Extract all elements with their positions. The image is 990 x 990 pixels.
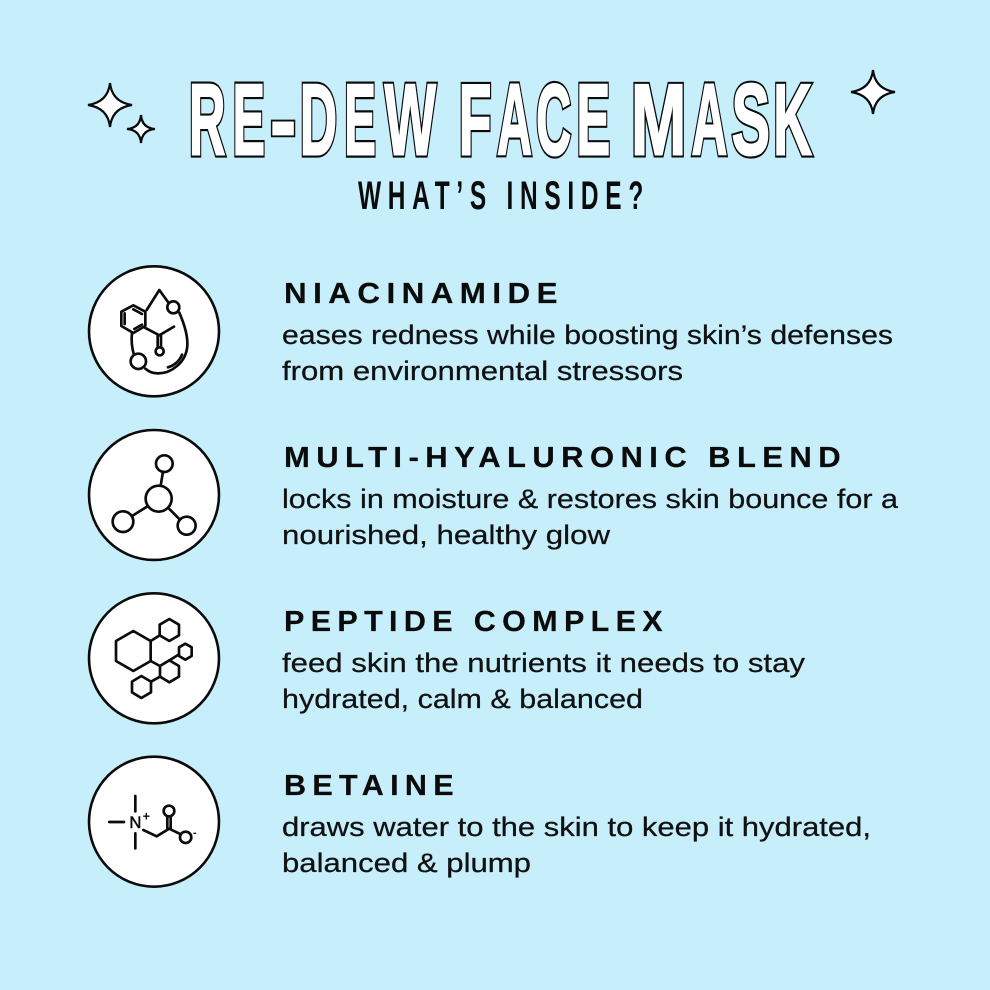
title: D xyxy=(300,63,337,176)
icon: three-node molecule xyxy=(89,430,219,560)
title: F xyxy=(459,65,491,177)
title: - xyxy=(270,64,296,177)
ingredient: niacinamide xyxy=(89,266,893,396)
description: peptide complex: hydrated, calm & balanced xyxy=(282,684,643,714)
description: multi-hyaluronic blend xyxy=(282,484,898,550)
title: C xyxy=(536,63,571,176)
description: betaine: draws water to the skin to keep it hydrated, xyxy=(282,812,871,842)
description: peptide complex xyxy=(282,648,806,714)
title: A xyxy=(692,63,727,176)
title: A xyxy=(497,63,532,176)
title: E xyxy=(233,63,265,176)
title: A xyxy=(692,63,727,176)
title: S xyxy=(732,65,770,177)
title: S xyxy=(732,65,770,177)
title: F xyxy=(459,65,491,177)
ingredient: multi-hyaluronic blend xyxy=(89,430,898,560)
title: - xyxy=(270,64,296,177)
heading: peptide complex: PEPTIDE COMPLEX xyxy=(284,606,669,638)
description: niacinamide: from environmental stressors xyxy=(282,356,683,386)
description: multi-hyaluronic blend: nourished, healthy glow xyxy=(282,520,611,550)
title: K xyxy=(773,65,812,177)
description: multi-hyaluronic blend: locks in moisture & restores skin bounce for a xyxy=(282,484,898,514)
title: C xyxy=(536,63,571,176)
icon: betaine structural formula: + xyxy=(143,810,150,824)
title: D xyxy=(300,63,337,176)
title xyxy=(189,63,812,177)
subtitle: WHAT’S INSIDE? xyxy=(358,174,650,218)
icon: sparkle large left xyxy=(88,83,132,127)
ingredient: peptide complex xyxy=(89,593,806,723)
description: niacinamide xyxy=(282,320,893,386)
title: K xyxy=(773,65,812,177)
title: R xyxy=(189,63,225,176)
title: W xyxy=(384,65,436,177)
title: R xyxy=(189,63,225,176)
title: W xyxy=(384,65,436,177)
title: E xyxy=(576,63,610,176)
ingredient: betaine xyxy=(89,757,871,887)
icon: betaine structural formula: N xyxy=(129,813,141,832)
icon: betaine structural formula xyxy=(89,757,219,887)
title: M xyxy=(631,65,686,177)
heading: niacinamide: NIACINAMIDE xyxy=(284,278,564,310)
title: E xyxy=(344,64,376,176)
description: betaine: balanced & plump xyxy=(282,848,531,878)
icon: sparkle right xyxy=(851,70,895,114)
icon: betaine structural formula: - xyxy=(193,827,197,839)
icon: hexagon cluster xyxy=(89,593,219,723)
heading: multi-hyaluronic blend: MULTI-HYALURONIC BLEND xyxy=(284,442,847,474)
icon: niacinamide droplet molecule xyxy=(89,266,219,396)
heading: betaine: BETAINE xyxy=(284,770,460,802)
icon: sparkle small left xyxy=(127,115,155,143)
title: A xyxy=(497,63,532,176)
title: E xyxy=(233,63,265,176)
description: betaine xyxy=(282,812,871,878)
title: E xyxy=(344,64,376,176)
description: peptide complex: feed skin the nutrients it needs to stay xyxy=(282,648,806,678)
description: niacinamide: eases redness while boosting skin’s defenses xyxy=(282,320,893,350)
title: E xyxy=(576,63,610,176)
title: M xyxy=(631,65,686,177)
